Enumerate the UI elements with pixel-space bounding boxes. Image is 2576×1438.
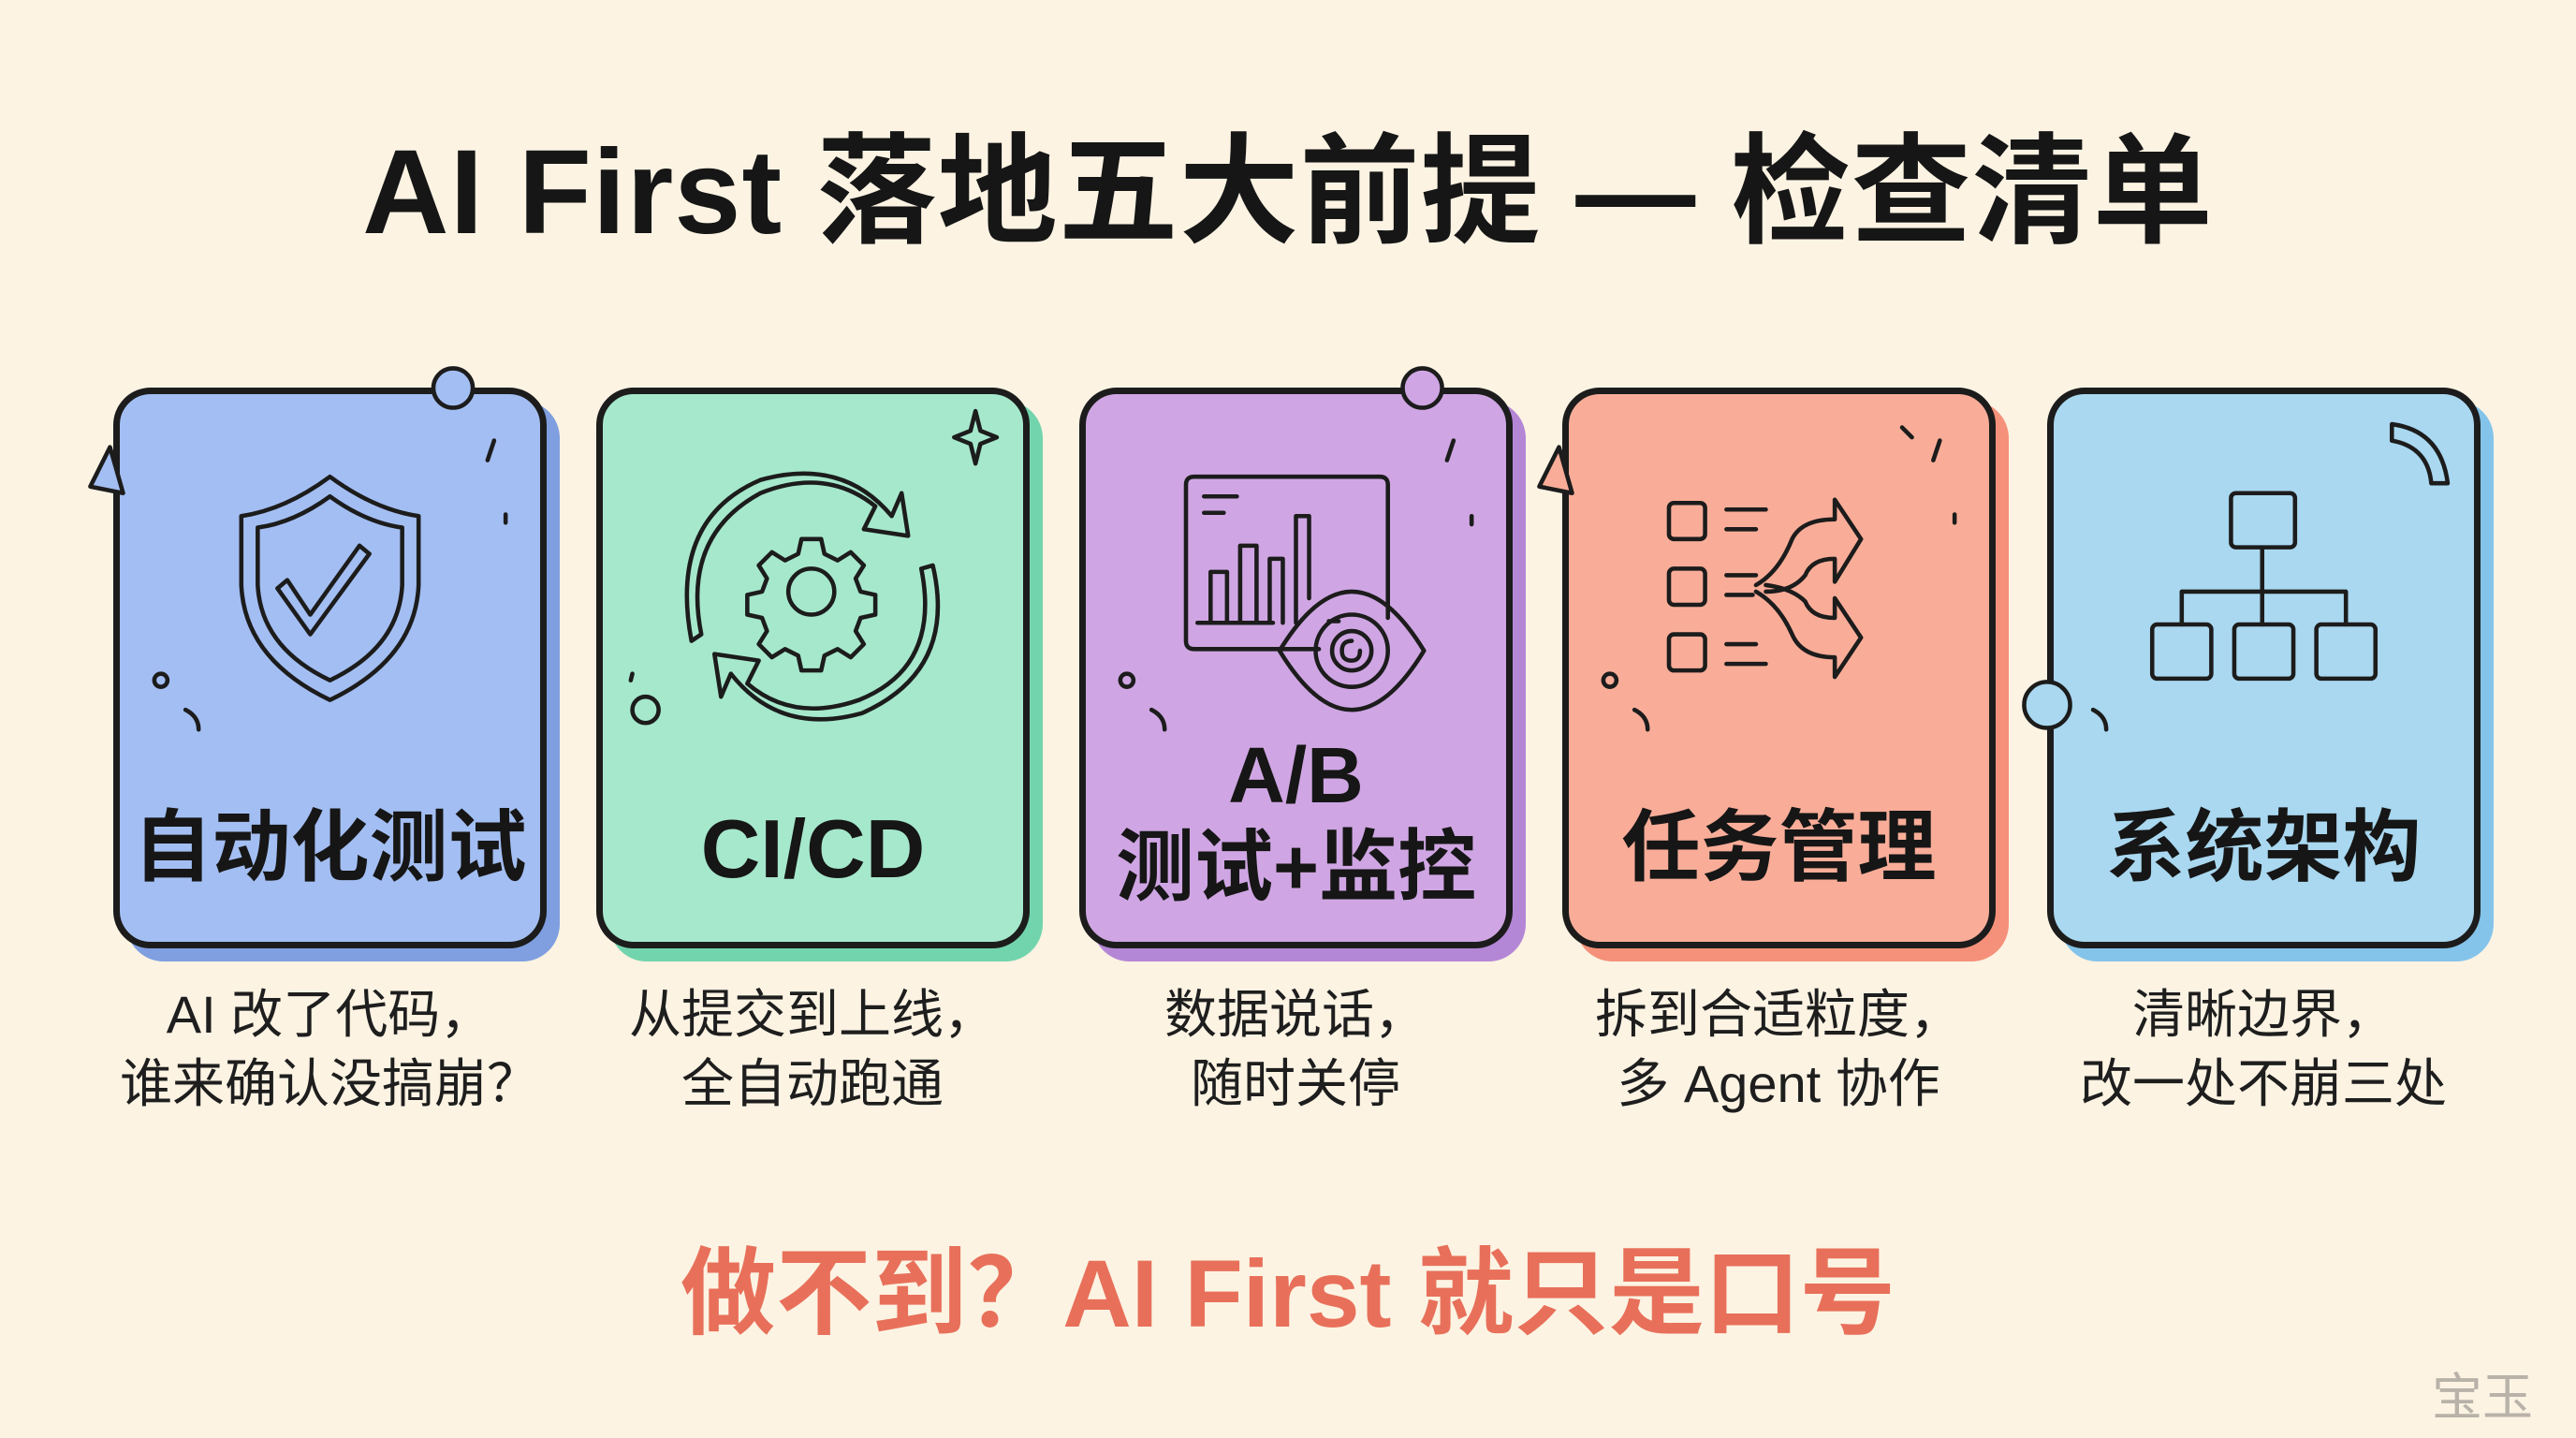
- label: 任务管理: [1621, 803, 1936, 891]
- icon: task list with split arrows: [1669, 500, 1861, 677]
- panel: system architecture: [2047, 388, 2481, 948]
- caption 1: [120, 985, 539, 1113]
- watermark: 宝玉: [2432, 1370, 2533, 1426]
- caption 3: 数据说话，: [1164, 985, 1427, 1044]
- caption 2: 从提交到上线，: [629, 985, 996, 1044]
- caption 3: [1164, 985, 1427, 1113]
- panel: CI/CD: [596, 388, 1030, 948]
- label: [1116, 731, 1476, 911]
- caption 1: 谁来确认没搞崩？: [120, 1054, 539, 1113]
- panel: task management: [1562, 388, 1996, 948]
- caption 2: 全自动跑通: [681, 1054, 944, 1113]
- callout: bottom slogan: 做不到？AI First 就只是口号: [681, 1240, 1895, 1347]
- caption 1: AI 改了代码，: [167, 985, 492, 1044]
- caption 4: 拆到合适粒度，: [1595, 985, 1962, 1044]
- caption 2: [629, 985, 996, 1113]
- caption 5: [2080, 985, 2447, 1113]
- caption 3: 随时关停: [1191, 1054, 1400, 1113]
- icon: shield with check: [242, 477, 418, 700]
- label: 自动化测试: [133, 803, 526, 891]
- caption 5: 改一处不崩三处: [2080, 1054, 2447, 1113]
- label: A/B: [1228, 731, 1364, 819]
- icon: gear cycle: [687, 474, 938, 719]
- icon: chart with eye: [1186, 477, 1424, 710]
- title: AI First 落地五大前提 — 检查清单: [362, 125, 2214, 259]
- icon: org chart: [2152, 493, 2376, 679]
- label: CI/CD: [701, 802, 925, 895]
- label: 系统架构: [2106, 803, 2421, 891]
- label: 测试+监控: [1116, 823, 1476, 911]
- panel: automated testing: [113, 388, 547, 948]
- caption 4: [1595, 985, 1962, 1113]
- caption 4: 多 Agent 协作: [1617, 1054, 1940, 1113]
- panel: A/B testing: [1079, 388, 1513, 948]
- caption 5: 清晰边界，: [2132, 985, 2394, 1044]
